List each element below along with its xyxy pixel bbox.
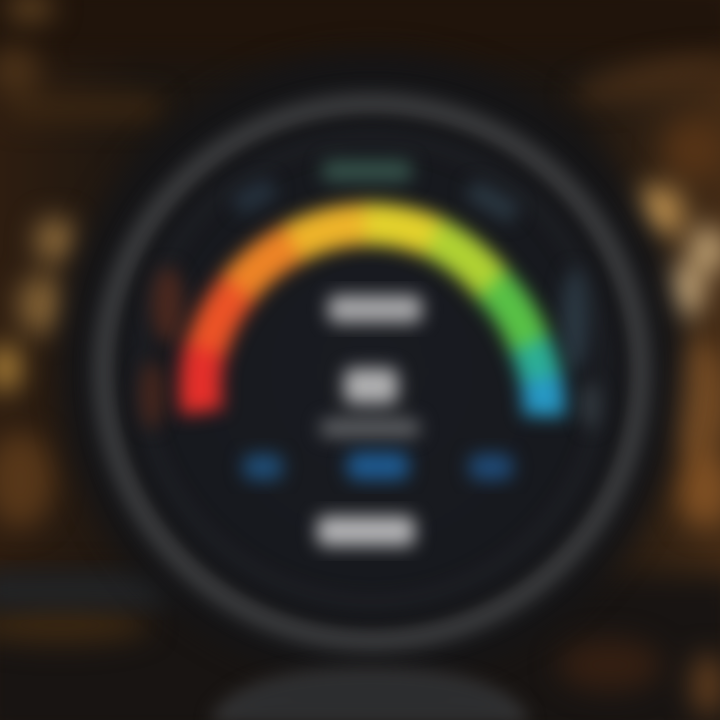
bokeh lights right	[558, 50, 720, 717]
outer ring	[104, 104, 640, 640]
inner ring	[140, 138, 604, 602]
dial body	[60, 53, 684, 677]
bottom value label	[317, 516, 415, 546]
bokeh lights left	[0, 0, 160, 643]
rainbow arc gauge	[200, 224, 544, 416]
dark band lower left	[0, 575, 170, 605]
scale labels around the arc	[140, 160, 599, 429]
top value label	[328, 295, 422, 323]
bottom knob	[215, 672, 525, 720]
blue indicators	[243, 452, 513, 480]
center value	[320, 368, 420, 437]
